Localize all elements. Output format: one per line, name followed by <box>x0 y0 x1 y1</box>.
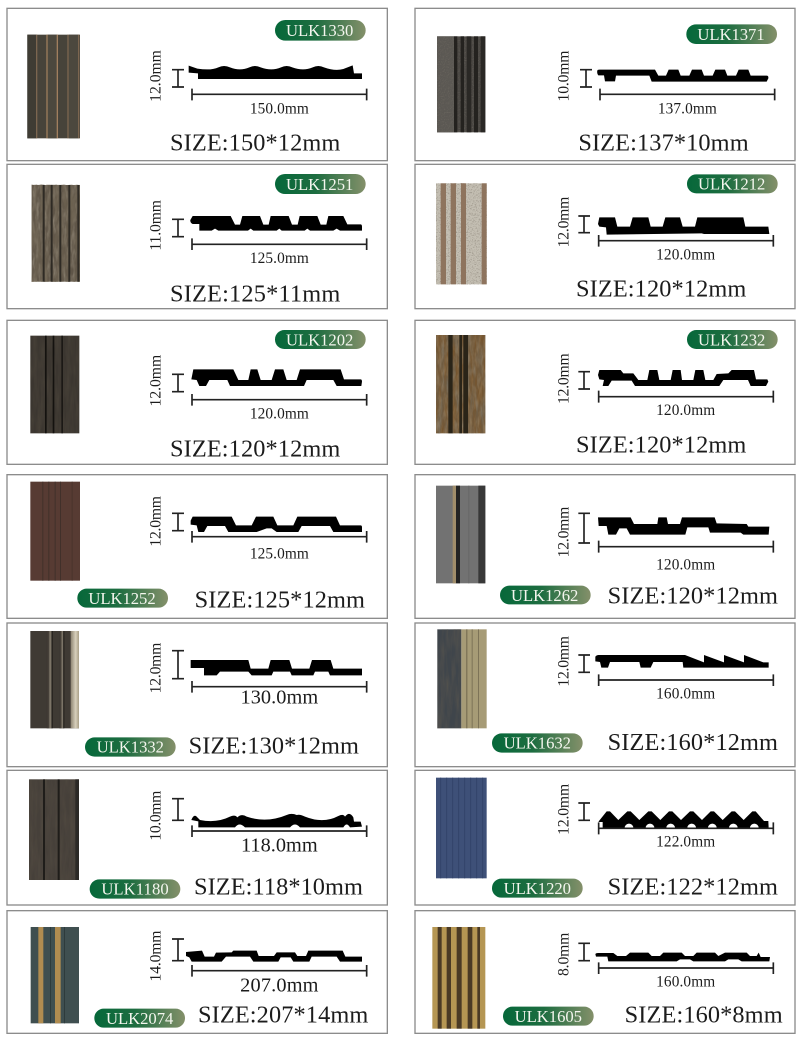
thickness bracket <box>578 803 590 820</box>
width dimension <box>192 238 367 267</box>
width dimension <box>192 965 367 996</box>
panel: ULK1330 <box>7 8 387 161</box>
width dimension <box>599 962 773 991</box>
width dimension <box>599 391 773 419</box>
thickness bracket <box>578 513 590 543</box>
profile: ULK1330 <box>189 65 362 79</box>
badge: ULK1252: ULK1252 <box>88 589 156 608</box>
thickness label: 12.0mm <box>555 636 572 687</box>
width dimension <box>192 681 367 708</box>
product photo: ULK1232 <box>436 335 485 433</box>
product photo: ULK1251 <box>32 185 80 282</box>
thickness label: 10.0mm <box>148 791 165 841</box>
size text: SIZE:150*12mm <box>170 130 340 157</box>
panel: ULK1251 <box>7 164 387 309</box>
width dimension: 125.0mm <box>250 250 309 267</box>
thickness label: 12.0mm <box>148 496 165 547</box>
badge: ULK1605: ULK1605 <box>515 1007 582 1026</box>
thickness label: 10.0mm <box>555 50 572 101</box>
thickness bracket <box>172 939 184 961</box>
product photo: ULK1212 <box>436 183 487 284</box>
size text: SIZE:120*12mm <box>170 436 340 463</box>
thickness bracket <box>172 799 184 820</box>
profile: ULK1262 <box>598 517 769 535</box>
thickness bracket <box>578 216 590 233</box>
size text: SIZE:125*12mm <box>195 586 365 613</box>
size text: SIZE:122*12mm <box>608 874 778 901</box>
width dimension <box>192 394 367 422</box>
badge: ULK1262: ULK1262 <box>511 586 578 605</box>
size text: SIZE:160*12mm <box>608 729 778 756</box>
badge: ULK1251: ULK1251 <box>286 175 353 194</box>
panel: ULK1605 <box>415 911 795 1033</box>
thickness label: 12.0mm <box>555 197 572 247</box>
thickness label: 14.0mm <box>148 930 165 981</box>
profile: ULK2074 <box>186 951 362 962</box>
width dimension: 150.0mm <box>250 100 309 117</box>
panel: ULK1220 <box>415 770 795 905</box>
thickness label: 8.0mm <box>555 933 572 976</box>
badge: ULK1202: ULK1202 <box>286 330 353 349</box>
thickness bracket <box>172 219 184 237</box>
profile: ULK1605 <box>595 953 770 961</box>
thickness label: 12.0mm <box>555 353 572 404</box>
width dimension: 160.0mm <box>656 686 715 703</box>
thickness bracket <box>172 651 184 679</box>
width dimension <box>599 674 773 703</box>
thickness bracket <box>578 655 590 672</box>
panel: ULK1262 <box>415 475 795 618</box>
profile: ULK1220 <box>599 811 769 828</box>
badge: ULK1330: ULK1330 <box>286 21 353 40</box>
panel: ULK1180 <box>7 770 387 905</box>
size text: SIZE:120*12mm <box>576 432 746 459</box>
width dimension: 207.0mm <box>240 974 319 996</box>
panel: ULK1252 <box>7 475 387 618</box>
product photo: ULK1605 <box>432 927 485 1029</box>
size text: SIZE:207*14mm <box>198 1002 368 1029</box>
product photo: ULK1252 <box>30 482 80 581</box>
width dimension: 120.0mm <box>250 405 309 422</box>
badge: ULK1371: ULK1371 <box>697 25 765 44</box>
size text: SIZE:120*12mm <box>608 582 778 609</box>
profile: ULK1632 <box>595 655 769 668</box>
product photo: ULK1330 <box>27 35 80 138</box>
size text: SIZE:125*11mm <box>170 281 340 308</box>
width dimension: 137.0mm <box>658 100 717 117</box>
thickness bracket <box>578 372 590 389</box>
product photo: ULK2074 <box>31 927 79 1023</box>
panel: ULK1212 <box>415 164 795 309</box>
thickness bracket <box>578 943 590 961</box>
width dimension <box>600 89 775 117</box>
profile: ULK1371 <box>597 70 768 82</box>
product photo: ULK1180 <box>29 779 79 880</box>
panel: ULK1332 <box>7 623 387 767</box>
panel: ULK2074 <box>7 911 387 1033</box>
badge: ULK1232: ULK1232 <box>698 330 765 349</box>
badge: ULK1180: ULK1180 <box>101 880 169 899</box>
width dimension <box>192 825 367 856</box>
thickness label: 12.0mm <box>148 50 165 102</box>
product photo: ULK1632 <box>437 629 487 728</box>
size text: SIZE:120*12mm <box>576 276 746 303</box>
panel: ULK1371 <box>415 8 795 161</box>
badge: ULK1212: ULK1212 <box>698 174 765 193</box>
width dimension: 125.0mm <box>250 545 309 562</box>
profile: ULK1232 <box>598 370 768 386</box>
width dimension <box>192 89 367 117</box>
profile: ULK1212 <box>598 217 769 235</box>
product photo: ULK1202 <box>30 336 79 433</box>
width dimension: 122.0mm <box>656 834 715 851</box>
thickness bracket <box>172 374 184 392</box>
product photo: ULK1262 <box>436 486 485 583</box>
thickness bracket <box>172 513 184 531</box>
product photo: ULK1371 <box>437 36 485 132</box>
thickness bracket <box>580 70 592 87</box>
width dimension <box>599 541 773 573</box>
profile: ULK1251 <box>190 216 362 231</box>
size text: SIZE:118*10mm <box>194 874 363 901</box>
width dimension: 120.0mm <box>656 402 715 419</box>
width dimension <box>599 822 773 851</box>
width dimension: 118.0mm <box>241 834 318 856</box>
thickness bracket <box>172 70 184 87</box>
panel: ULK1202 <box>7 320 387 464</box>
profile: ULK1332 <box>191 660 362 675</box>
badge: ULK1220: ULK1220 <box>504 879 571 898</box>
badge: ULK1330 <box>275 20 366 41</box>
thickness label: 12.0mm <box>148 643 165 693</box>
thickness label: 11.0mm <box>148 200 165 251</box>
profile: ULK1202 <box>191 369 362 386</box>
width dimension: 120.0mm <box>656 556 715 573</box>
badge: ULK2074: ULK2074 <box>106 1009 174 1028</box>
width dimension: 130.0mm <box>240 686 318 708</box>
panel: ULK1232 <box>415 320 795 464</box>
width dimension <box>192 531 367 562</box>
width dimension: 160.0mm <box>656 974 715 991</box>
size text: SIZE:137*10mm <box>578 130 749 157</box>
thickness label: 12.0mm <box>148 355 165 406</box>
panel: ULK1632 <box>415 623 795 767</box>
width dimension: 120.0mm <box>656 246 715 263</box>
size text: SIZE:160*8mm <box>625 1002 783 1029</box>
badge: ULK1332: ULK1332 <box>97 738 164 757</box>
product photo: ULK1220 <box>436 778 487 878</box>
thickness label: 12.0mm <box>555 507 572 557</box>
size text: SIZE:130*12mm <box>189 732 359 759</box>
product photo: ULK1332 <box>30 631 79 728</box>
profile: ULK1180 <box>191 814 362 827</box>
badge: ULK1632: ULK1632 <box>504 734 571 753</box>
width dimension <box>599 235 773 263</box>
thickness label: 12.0mm <box>555 784 572 835</box>
profile: ULK1252 <box>191 517 362 532</box>
